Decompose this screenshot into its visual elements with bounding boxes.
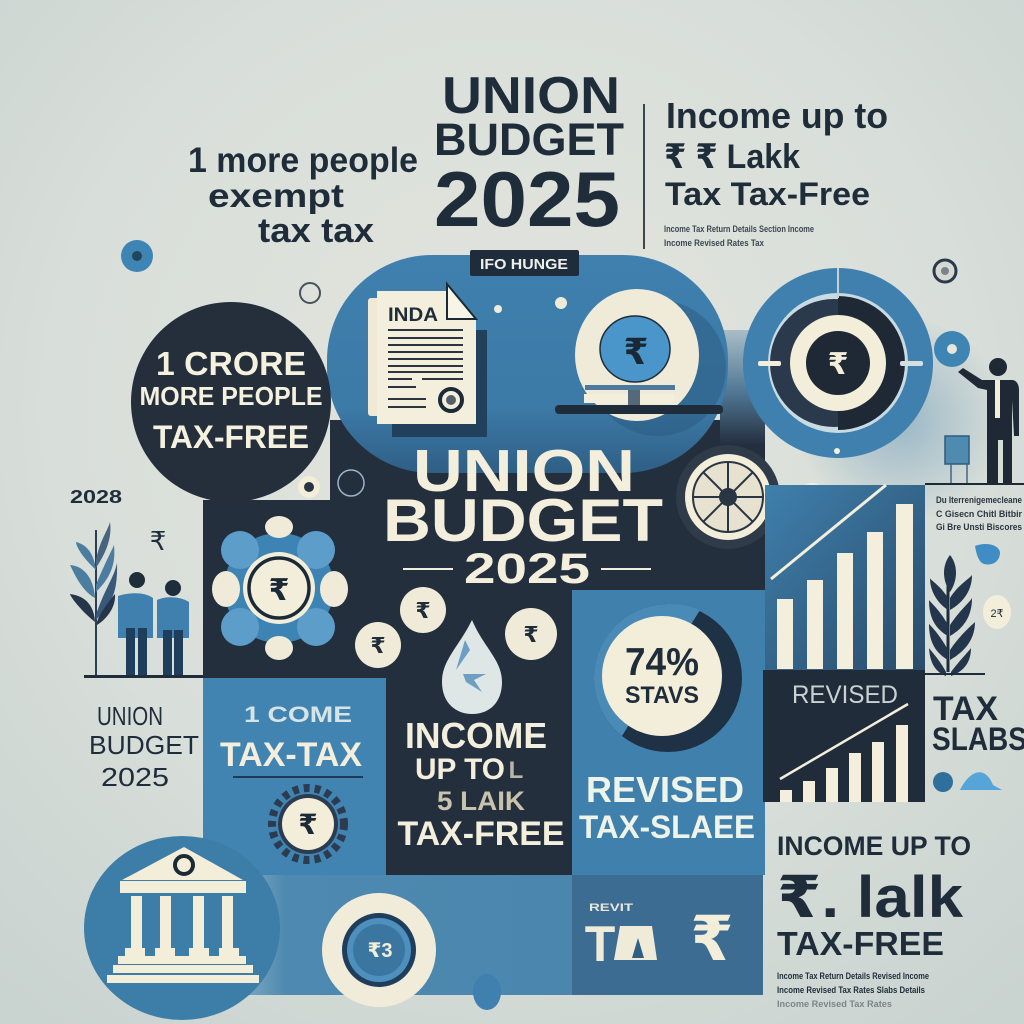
panel: blue tax-tax: TAX-TAX	[220, 736, 362, 774]
panel: dark circle one crore: 1 CRORE	[156, 345, 306, 382]
icons: rupee coins	[355, 587, 557, 668]
text block: income up to bottom right: TAX-FREE	[777, 925, 944, 962]
panel: blue revised tax slabs	[572, 590, 765, 875]
panel: dark circle one crore: TAX-FREE	[153, 419, 309, 455]
text block: tiny right notes: C Gisecn Chitl Bitbir	[936, 509, 1022, 519]
panel: blue revised tax slabs: REVISED	[586, 769, 744, 810]
panel: dark circle one crore	[131, 302, 331, 502]
panel: revised bar chart dark: REVISED	[792, 681, 898, 709]
heading: union budget 2025 centre	[383, 438, 663, 593]
text block: income up to tax-free	[664, 95, 888, 248]
text block: union budget 2025 left: 2025	[101, 762, 169, 792]
heading: union budget 2025 top: 2025	[434, 155, 620, 243]
text block: income up to tax-free: ₹ ₹ Lakk	[664, 138, 800, 176]
panel: bottom blue strip	[215, 875, 573, 995]
text block: 1 more people exempt: tax tax	[258, 212, 374, 250]
icon: document india: INDA	[388, 305, 438, 326]
text block: 1 more people exempt: 1 more people	[188, 141, 418, 180]
soft glow behind target	[795, 315, 1005, 525]
panel: bottom dark-blue tax	[572, 875, 763, 995]
icons: rupee coins: ₹	[415, 598, 431, 623]
icon: bank building	[84, 836, 280, 1020]
icon: target rupee circle	[743, 268, 933, 458]
text block: 1 more people exempt: exempt	[208, 177, 344, 214]
text block: 1 more people exempt	[188, 141, 418, 250]
text block: income up to bottom right: ₹. lalk	[777, 865, 964, 930]
panel: blue tax-tax: 1 COME	[244, 702, 352, 727]
heading: union budget 2025 top	[434, 67, 624, 243]
panel: top blue shape: IFO HUNGE	[480, 256, 568, 273]
icon: rupee coin on stand	[555, 289, 726, 436]
panel: blue revised tax slabs: TAX-SLAEE	[579, 809, 755, 845]
text block: income up to bottom right: Income Revised Tax Rates Slabs Details	[777, 985, 925, 995]
icon: bottom coin	[322, 893, 436, 1007]
icon: rupee coin on stand: ₹	[623, 331, 649, 372]
heading: union budget 2025 top: UNION	[442, 67, 620, 125]
panel: dark circle one crore: MORE PEOPLE	[140, 381, 322, 411]
panel: income up to tax-free dark: TAX-FREE	[398, 815, 564, 853]
heading: union budget 2025 centre: UNION	[413, 438, 635, 504]
panel: blue revised tax slabs: 74%	[625, 641, 699, 684]
text block: 2028 left: 2028	[70, 487, 122, 507]
icon: rupee flower	[212, 516, 348, 660]
icons: rupee coins: ₹	[370, 633, 386, 658]
panel: income up to tax-free dark: UP TO	[415, 753, 505, 786]
text block: union budget 2025 left	[89, 701, 199, 792]
panel: revised bar chart dark	[763, 670, 925, 802]
icon: left plant and people: ₹	[150, 526, 166, 556]
icon: man pointing	[925, 331, 1024, 485]
text block: income up to bottom right: Income Tax Return Details Revised Income	[777, 971, 929, 981]
text block: income up to tax-free: Income Tax Return Details Section Income	[664, 224, 814, 234]
small icons top area	[121, 240, 956, 511]
heading: union budget 2025 centre: BUDGET	[383, 487, 663, 554]
panel: bottom dark-blue tax: REVIT	[589, 902, 633, 914]
text block: income up to bottom right	[777, 831, 971, 1009]
icon: wheel	[676, 445, 780, 549]
text block: income up to bottom right: INCOME UP TO	[777, 831, 971, 861]
icon: small blue marks	[933, 772, 1002, 792]
panel: bottom dark-blue tax: T	[585, 916, 615, 972]
panel: income up to tax-free dark: INCOME	[405, 715, 547, 756]
panel: bottom dark-blue tax: ₹	[690, 905, 734, 974]
panel: blue tax-tax: ₹	[298, 809, 318, 840]
icon: bottom coin: ₹3	[367, 940, 393, 962]
icon: leaf right	[925, 544, 1011, 676]
icon: target rupee circle: ₹	[828, 348, 848, 381]
icon: left plant and people	[70, 522, 204, 678]
dots on top blue	[494, 297, 567, 313]
text block: tax slabs	[932, 690, 1024, 757]
text block: income up to tax-free: Tax Tax-Free	[665, 176, 870, 212]
icon: leaf right: 2₹	[990, 608, 1004, 620]
heading: union budget 2025 centre: 2025	[464, 545, 590, 593]
panel: dark centre	[203, 420, 765, 875]
text block: income up to tax-free: Income Revised Rates Tax	[664, 238, 764, 248]
icon: water drop	[442, 620, 502, 714]
panel: income up to tax-free dark: L	[509, 757, 523, 784]
divider line	[643, 104, 645, 249]
panel: blue revised tax slabs: STAVS	[625, 682, 699, 709]
text block: tax slabs: TAX	[933, 690, 998, 728]
text block: union budget 2025 left: UNION	[97, 701, 163, 731]
panel: top blue shape	[327, 250, 728, 473]
icon: document india	[368, 284, 487, 437]
panel: bar chart blue	[765, 485, 925, 670]
text block: tiny right notes	[936, 495, 1022, 532]
panel: blue tax-tax	[203, 678, 386, 875]
heading: union budget 2025 top: BUDGET	[434, 114, 624, 165]
icon: rupee flower: ₹	[269, 574, 289, 607]
icon: bottom pin	[473, 974, 501, 1010]
panel: income up to tax-free dark: 5 LAIK	[437, 786, 526, 816]
text block: income up to tax-free: Income up to	[666, 95, 888, 136]
panel: income up to tax-free dark	[398, 715, 564, 853]
text block: income up to bottom right: Income Revised Tax Rates	[777, 999, 892, 1009]
text block: union budget 2025 left: BUDGET	[89, 730, 199, 760]
icons: rupee coins: ₹	[523, 622, 539, 647]
band: stipple bar behind top blue shape	[720, 330, 765, 445]
